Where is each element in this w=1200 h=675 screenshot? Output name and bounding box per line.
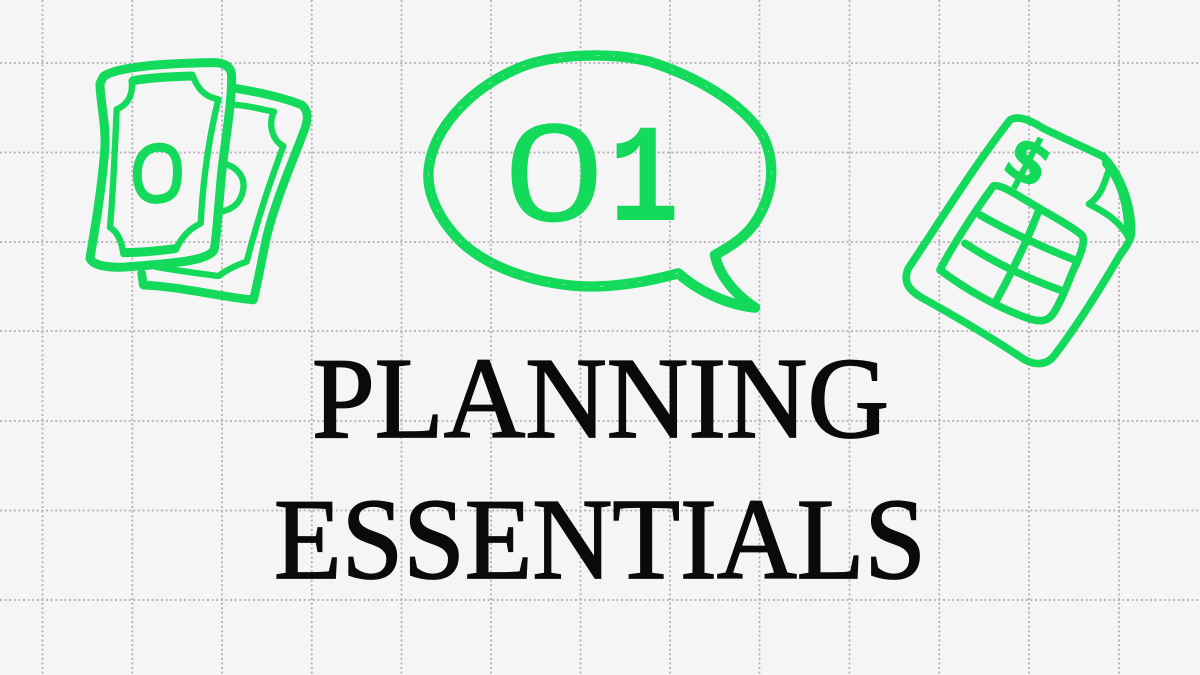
front banknote [90, 63, 232, 267]
section number [505, 94, 679, 262]
document outline [906, 118, 1132, 364]
back banknote [142, 88, 307, 300]
table [940, 186, 1083, 321]
folded corner [1089, 172, 1130, 240]
icon: spreadsheet document [906, 118, 1132, 364]
icon: banknotes [90, 63, 307, 300]
dollar sign: $ [992, 120, 1064, 203]
section number: 0 [505, 94, 603, 251]
title [274, 335, 926, 604]
title line 1: PLANNING [312, 335, 889, 463]
speech bubble [428, 55, 771, 308]
title line 2: ESSENTIALS [274, 476, 926, 604]
section number: 1 [609, 103, 679, 262]
